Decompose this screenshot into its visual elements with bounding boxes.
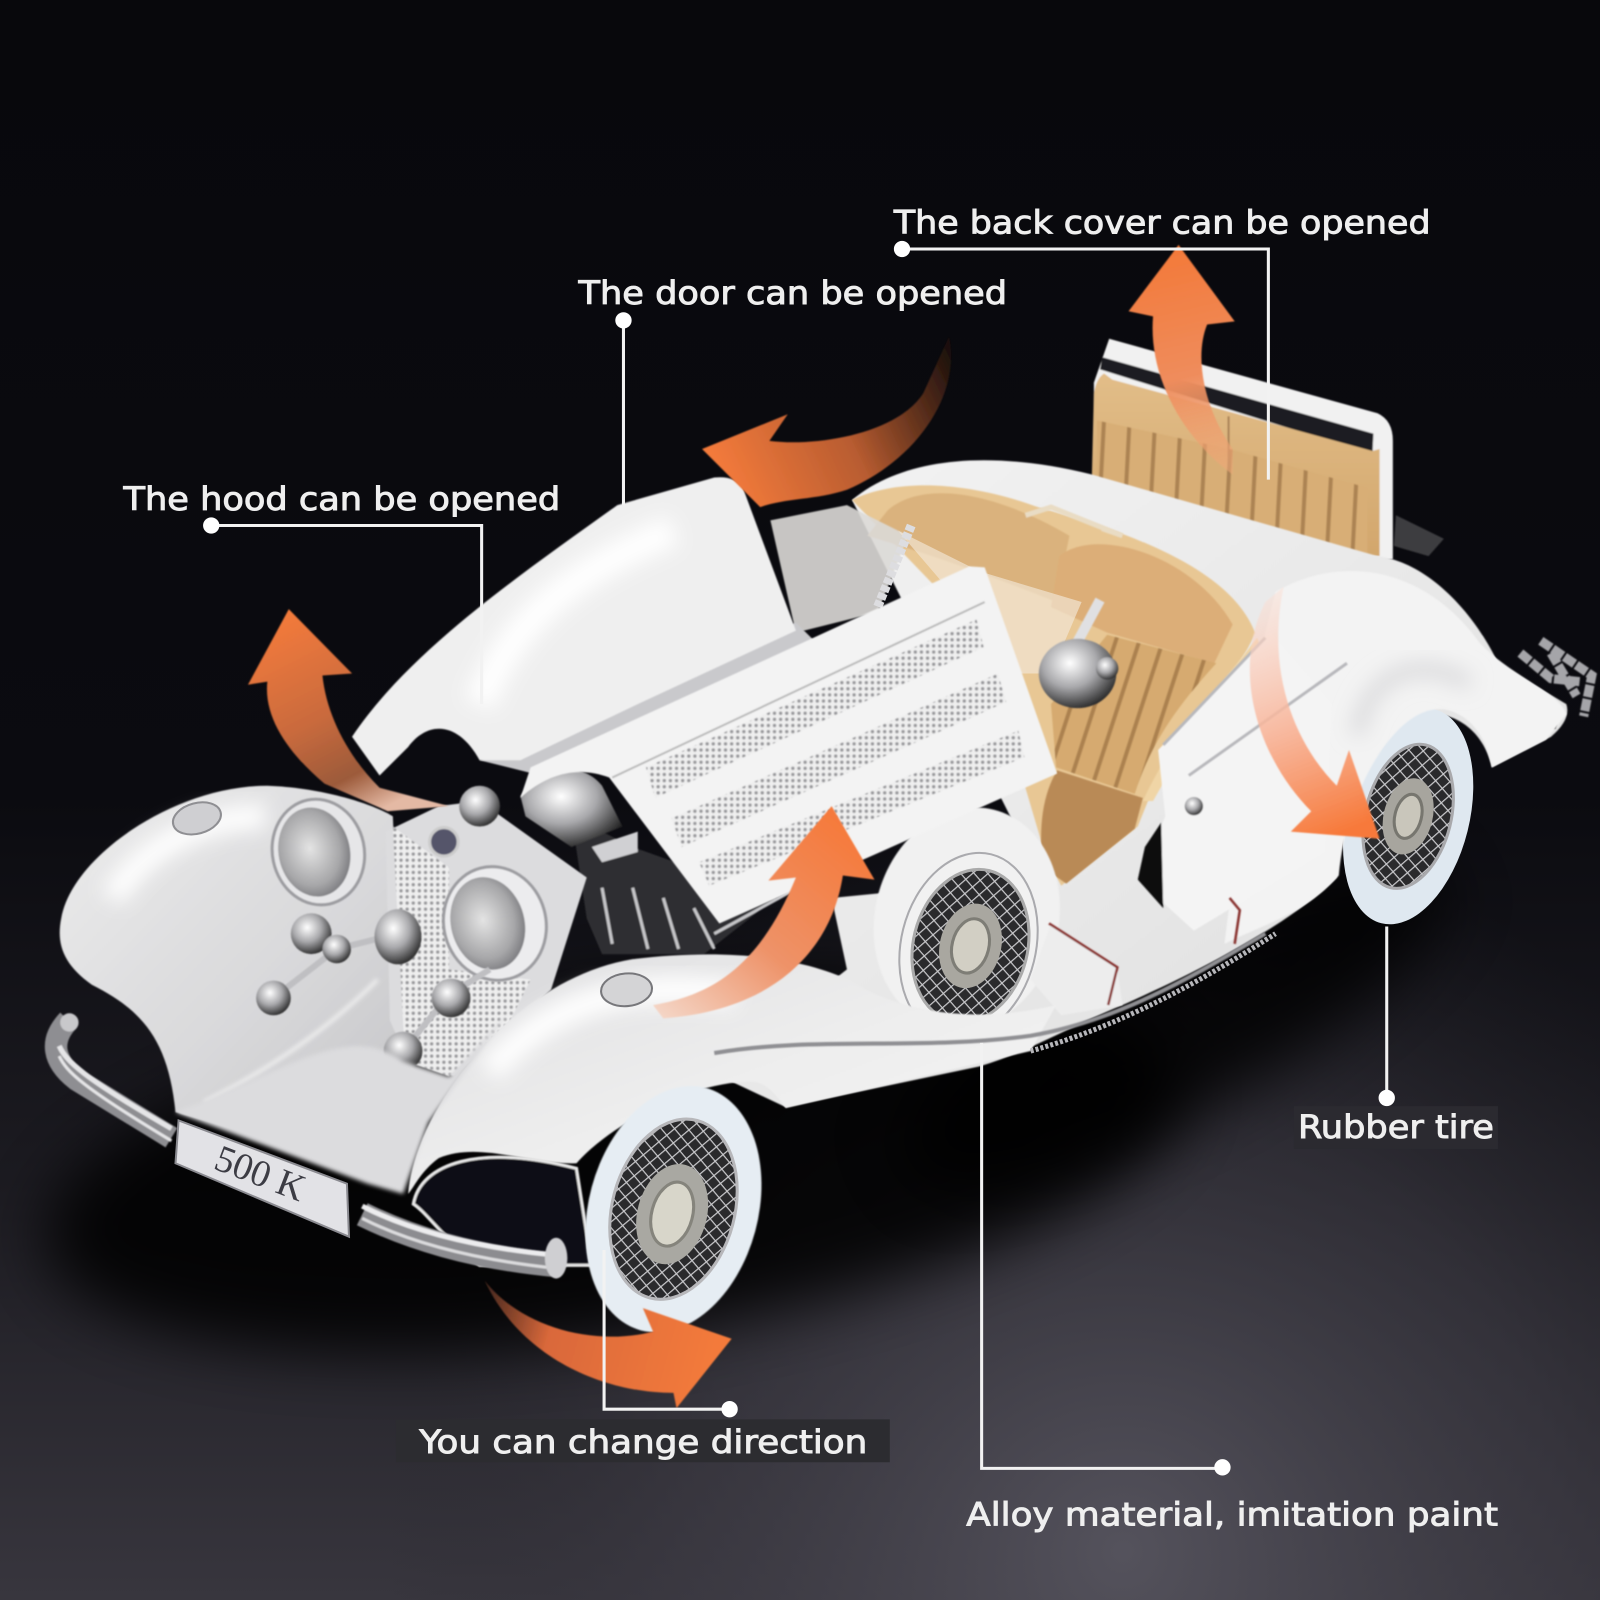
rear wheel <box>1322 695 1494 938</box>
callout: change direction <box>396 1250 890 1462</box>
license plate: 500 K <box>209 1137 311 1210</box>
arrow: back cover <box>1129 245 1235 474</box>
interior tan surround <box>852 485 1255 886</box>
hood gap fill <box>480 622 816 776</box>
callout: back cover: The back cover can be opened <box>893 206 1431 242</box>
headlights <box>262 791 559 992</box>
arrow: door <box>702 337 951 507</box>
car body <box>714 460 1567 1107</box>
chrome horns and lamps <box>256 786 500 1070</box>
rear mesh <box>1394 515 1444 556</box>
car model <box>56 339 1592 1352</box>
front seats <box>867 493 1263 884</box>
windshield <box>770 505 1082 673</box>
wheel arch <box>413 1157 592 1265</box>
callout: hood <box>122 482 560 704</box>
back cover panel <box>1092 339 1393 561</box>
callout: door: The door can be opened <box>577 276 1007 312</box>
arrow: steering direction <box>485 1281 732 1408</box>
steering wheel knob <box>1039 600 1118 708</box>
rear fender <box>1224 571 1566 944</box>
arrow: hood <box>248 609 449 811</box>
floor with red lines <box>1031 898 1240 1015</box>
door <box>1138 633 1347 931</box>
rear bumper <box>1478 641 1592 727</box>
callout: back cover <box>893 206 1431 480</box>
license plate <box>176 1120 349 1237</box>
callout: alloy material <box>966 1043 1498 1534</box>
fender badge <box>600 971 653 1008</box>
front wheel <box>559 1066 788 1352</box>
middle wheel <box>849 788 1083 1057</box>
callout: door <box>577 276 1007 505</box>
grille <box>386 801 587 1077</box>
arrow: rear wheel door <box>1250 587 1380 839</box>
arrow: right hood <box>653 806 874 1018</box>
right front fender <box>408 954 1056 1194</box>
hood left panel <box>352 477 796 776</box>
hood right panel <box>520 566 1057 923</box>
front bumper <box>56 1013 567 1279</box>
callout: rubber tire <box>1294 927 1498 1149</box>
callout: hood: The hood can be opened <box>122 482 560 518</box>
fender cap <box>169 797 225 839</box>
engine bay <box>520 769 816 954</box>
front centre panel <box>176 1010 510 1194</box>
callout: change direction: You can change direction <box>418 1425 867 1461</box>
left front fender <box>60 786 429 1168</box>
callout: alloy material: Alloy material, imitation paint <box>966 1498 1498 1534</box>
callout: rubber tire: Rubber tire <box>1298 1110 1494 1146</box>
